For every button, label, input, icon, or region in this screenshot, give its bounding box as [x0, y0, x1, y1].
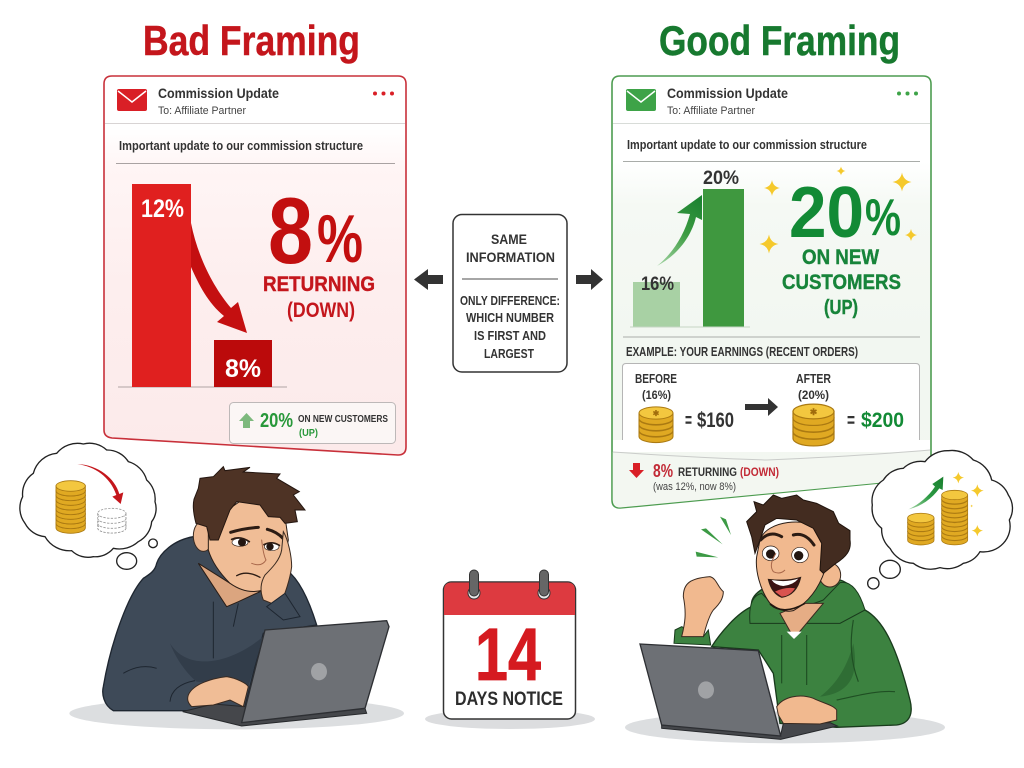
- footnote: 8% returning: 8%: [653, 461, 673, 481]
- footnote: 8% returning: (DOWN): [740, 465, 779, 479]
- card background: [612, 76, 931, 508]
- raised fist: [682, 577, 723, 637]
- before label: BEFORE: [635, 371, 677, 386]
- note body: [460, 293, 560, 361]
- footnote: 8% returning: RETURNING: [678, 465, 737, 479]
- menu dots: [897, 92, 918, 96]
- note heading: [466, 231, 555, 265]
- after label: (20%): [798, 388, 829, 402]
- person: happy man with laptop: [625, 495, 945, 743]
- recipient line: To: Affiliate Partner: [667, 105, 755, 117]
- person: frustrated man with laptop: [69, 467, 404, 729]
- coin stack ghost: [98, 508, 126, 533]
- stat label: down: (DOWN): [287, 299, 355, 322]
- stat label: on new customers: CUSTOMERS: [782, 271, 901, 294]
- note body: IS FIRST AND: [474, 328, 546, 343]
- caption: days notice: DAYS NOTICE: [455, 689, 563, 710]
- coin stack short: [908, 513, 934, 545]
- email subject heading: Commission Update: [667, 85, 788, 101]
- neck: [198, 563, 260, 607]
- note heading: INFORMATION: [466, 249, 555, 265]
- bar chart: 16% to 20%: [630, 168, 750, 327]
- big stat: 8%: [268, 178, 363, 283]
- big stat: 20%: %: [865, 189, 901, 247]
- before label: (16%): [642, 388, 671, 402]
- calendar shadow: [425, 709, 595, 729]
- ear: [193, 521, 213, 551]
- calendar rings: [468, 570, 550, 599]
- earnings example box: [613, 364, 930, 452]
- coin stack tall: [942, 490, 968, 545]
- arrow: rising: [657, 195, 702, 266]
- arrow: falling: [191, 223, 247, 333]
- title: Good Framing: Good Framing: [659, 17, 900, 64]
- excitement ticks: [696, 517, 731, 557]
- laptop: [640, 644, 837, 739]
- bar: 16%: [633, 282, 680, 327]
- arrow: coins falling: [77, 464, 123, 504]
- paper fold section: [613, 450, 930, 508]
- note body: WHICH NUMBER: [466, 310, 555, 325]
- card background: [104, 76, 406, 455]
- head: [193, 467, 305, 607]
- cloud outline: [20, 443, 156, 557]
- face: [208, 497, 288, 591]
- hood: [750, 582, 865, 623]
- recipient line: To: Affiliate Partner: [158, 105, 246, 117]
- label: 20%: 20%: [703, 168, 739, 189]
- header divider: [105, 122, 405, 124]
- email subject heading: Commission Update: [158, 85, 279, 101]
- hoodie: [103, 537, 317, 720]
- cloud outline: [872, 450, 1012, 569]
- desk shadow: [69, 697, 404, 729]
- before label: [635, 371, 677, 402]
- arrow: pointing left: [414, 269, 443, 290]
- title: Bad Framing: Bad Framing: [143, 17, 360, 64]
- note heading: SAME: [491, 231, 527, 247]
- calendar page: [444, 582, 576, 719]
- arrow: coins rising: [908, 477, 943, 509]
- callout: 20% on new customers: [230, 402, 396, 444]
- note body: LARGEST: [484, 346, 534, 361]
- label: 16%: 16%: [641, 274, 674, 295]
- value: $160: $160: [697, 409, 734, 432]
- hair: [747, 495, 850, 573]
- typing hand: [188, 677, 248, 707]
- number: 14: 14: [475, 613, 541, 696]
- hoodie: [712, 580, 911, 727]
- arrow: before to after: [745, 398, 778, 416]
- thought bubble: coins shrinking: [20, 443, 157, 569]
- icon: red envelope: [117, 89, 147, 111]
- sleeve: [267, 593, 300, 620]
- typing hand: [777, 696, 837, 724]
- arrow: pointing right: [576, 269, 603, 290]
- stat label: on new customers: (UP): [824, 297, 858, 319]
- after label: AFTER: [796, 371, 831, 386]
- panel: good framing email card: [612, 76, 931, 508]
- label: 8%: 8%: [225, 355, 261, 383]
- callout: 20% on new customers: ON NEW CUSTOMERS: [298, 413, 388, 425]
- sparkles: [760, 166, 917, 254]
- stat label: on new customers: [782, 246, 901, 319]
- head: [747, 495, 865, 639]
- callout: 20% on new customers: 20%: [260, 410, 293, 432]
- panel: bad framing email card: [104, 76, 406, 455]
- coin stack full: [56, 481, 85, 533]
- note body: ONLY DIFFERENCE:: [460, 293, 560, 308]
- value: $160: =: [685, 410, 692, 432]
- icon: large coin stack: [793, 404, 834, 446]
- after label: [796, 371, 831, 402]
- calendar header: [444, 582, 575, 615]
- panel: same information note: [453, 214, 567, 372]
- hair: [193, 467, 305, 540]
- sad facial features: [231, 527, 283, 577]
- footnote: 8% returning: [653, 461, 779, 493]
- bar: 20%: [703, 189, 744, 327]
- calendar: 14 days notice: [425, 570, 595, 729]
- neck and collar: [780, 603, 823, 639]
- icon: green envelope: [626, 89, 656, 111]
- desk shadow: [625, 711, 945, 743]
- footnote: 8% returning: (was 12%, now 8%): [653, 481, 736, 493]
- big stat: 20%: 20: [789, 173, 864, 253]
- laptop: [183, 621, 389, 726]
- sleeve cuff: [674, 627, 711, 645]
- bar chart: 12% to 8%: [118, 184, 287, 387]
- big stat: 8%: 8: [268, 178, 313, 283]
- hand on cheek: [261, 532, 292, 607]
- face: [756, 522, 825, 611]
- stat label: on new customers: ON NEW: [802, 246, 879, 269]
- thought bubble: coins growing: [868, 450, 1012, 589]
- bar: 12%: [132, 184, 191, 387]
- happy facial features: [761, 534, 814, 610]
- stat label: returning: RETURNING: [263, 273, 375, 296]
- value: $160: [685, 409, 734, 432]
- header divider: [613, 122, 930, 124]
- callout: 20% on new customers: (UP): [299, 427, 318, 439]
- icon: large coin stack: ✱: [810, 407, 818, 417]
- label: 12%: 12%: [141, 195, 184, 223]
- ear: [819, 563, 841, 587]
- email intro sentence: Important update to our commission structure: [627, 138, 867, 152]
- menu dots: [373, 92, 394, 96]
- bar: 8%: [214, 340, 272, 387]
- value: $200: =: [847, 410, 855, 432]
- big stat: 8%: %: [317, 201, 363, 277]
- icon: small coin stack: [639, 407, 673, 443]
- icon: small coin stack: ✱: [653, 409, 660, 418]
- sparkles: [953, 472, 984, 536]
- icon: red down arrow: [629, 463, 644, 478]
- example heading: EXAMPLE: YOUR EARNINGS (RECENT ORDERS): [626, 345, 858, 359]
- email intro sentence: Important update to our commission structure: [119, 139, 363, 153]
- value: $200: $200: [861, 409, 904, 432]
